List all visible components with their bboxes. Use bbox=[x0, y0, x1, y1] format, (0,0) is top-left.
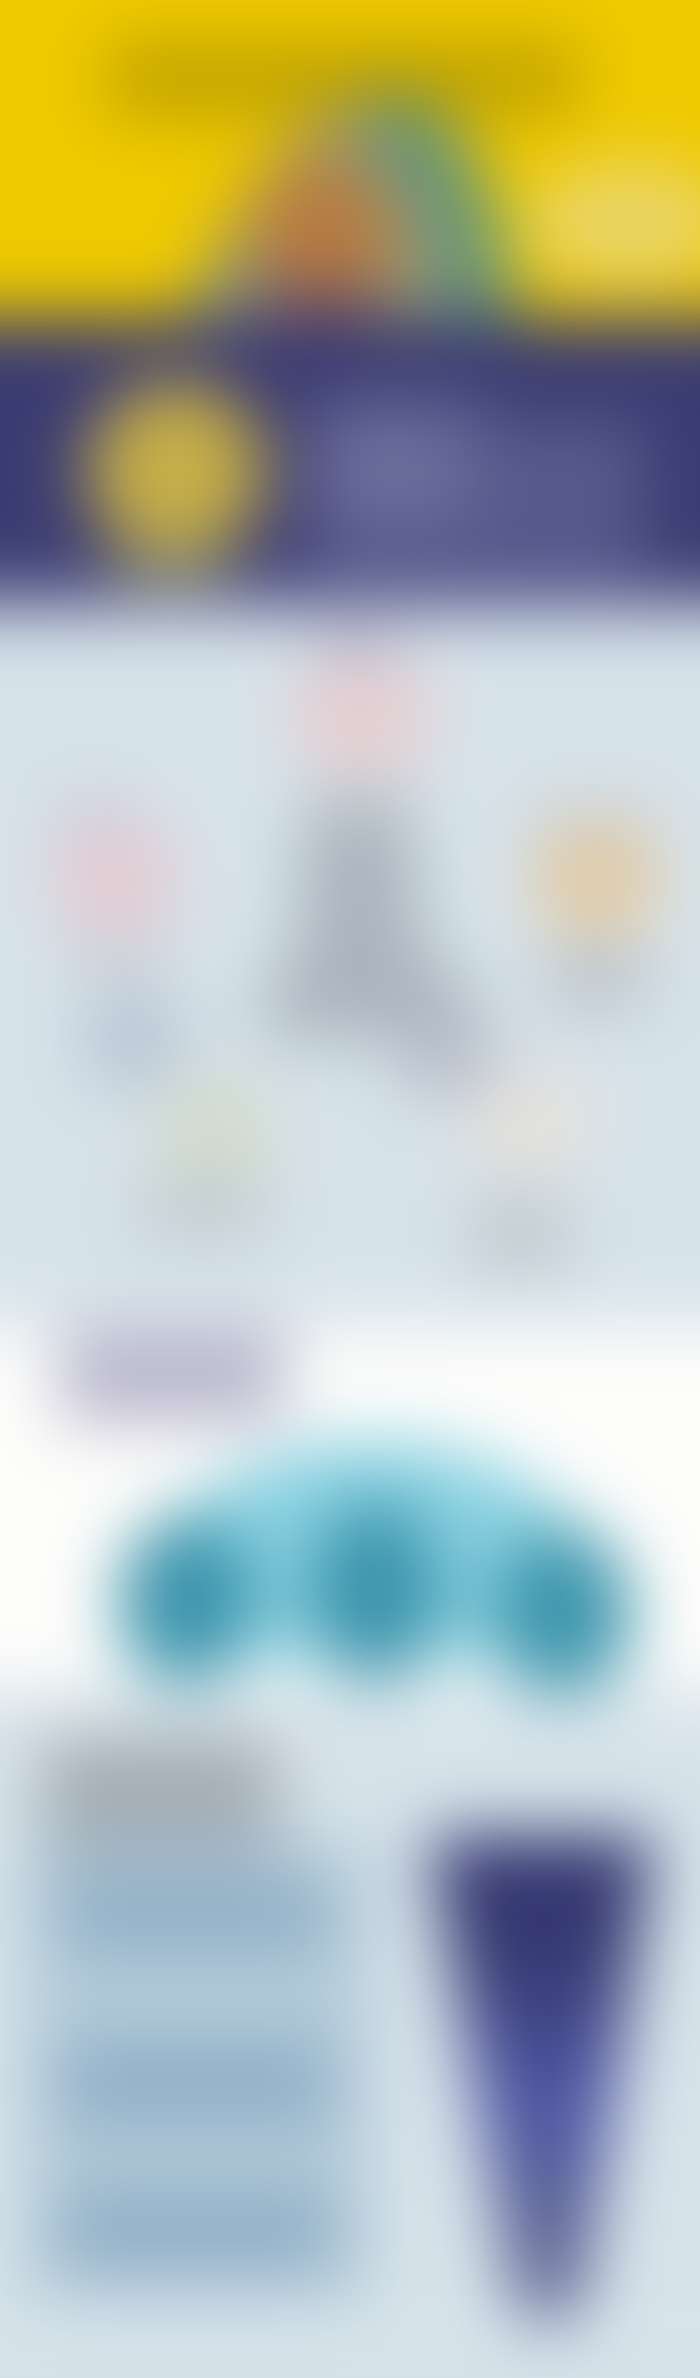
node: bottom cream bbox=[465, 1072, 589, 1172]
panel: yellow header bbox=[0, 0, 700, 345]
list row one bbox=[60, 1880, 328, 1950]
label: left node bbox=[85, 990, 180, 1085]
panel: white section bbox=[0, 1326, 700, 1696]
teal circle one bbox=[119, 1516, 255, 1684]
panel: lower section background bbox=[0, 1690, 700, 2378]
label: right node bbox=[545, 950, 650, 1010]
list row three bbox=[60, 2190, 332, 2268]
node: bottom green bbox=[152, 1077, 276, 1187]
panel: left list bbox=[25, 1738, 370, 2302]
list row two bbox=[60, 2040, 332, 2125]
panel: navy intro band bbox=[0, 318, 700, 615]
node: top pink bbox=[290, 635, 434, 810]
node: left pink bbox=[48, 800, 180, 965]
panel: circular diagram bbox=[48, 635, 662, 1270]
panel: light diagram background bbox=[0, 610, 700, 1326]
central figure bbox=[262, 800, 510, 1100]
heading bbox=[42, 1738, 277, 1833]
label: green node bbox=[138, 1180, 268, 1238]
arch illustration bbox=[175, 100, 495, 345]
icon: yellow circle bbox=[86, 380, 266, 615]
teal circle two bbox=[309, 1502, 441, 1682]
node: right orange bbox=[530, 805, 662, 940]
dome shape bbox=[119, 1440, 632, 1696]
light yellow glow bbox=[525, 160, 700, 284]
label: cream node bbox=[470, 1195, 570, 1270]
teal circle three bbox=[492, 1528, 632, 1696]
funnel graphic bbox=[428, 1835, 654, 2322]
section heading bbox=[60, 1330, 285, 1422]
band lower edge bbox=[0, 578, 700, 610]
title bbox=[108, 42, 578, 116]
intro text block bbox=[312, 400, 645, 580]
